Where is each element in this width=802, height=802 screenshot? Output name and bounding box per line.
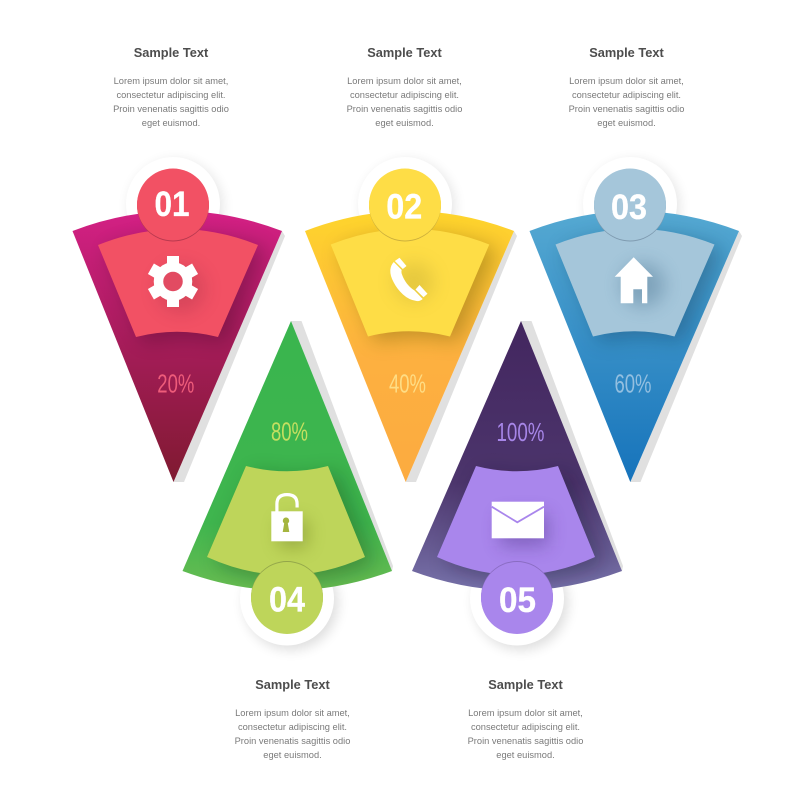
text block 01: Proin venenatis sagittis odio (113, 104, 229, 114)
percent 80: 80% (271, 417, 308, 447)
wedge 02 (305, 211, 514, 482)
badge rings (126, 157, 680, 650)
percent 60: 60% (614, 368, 652, 398)
text block 01: eget euismod. (142, 118, 200, 128)
icon: lock (271, 495, 307, 547)
text block 02: consectetur adipiscing elit. (350, 90, 459, 100)
text block 04: Proin venenatis sagittis odio (235, 736, 350, 746)
text block 02: Lorem ipsum dolor sit amet, (347, 76, 462, 86)
text block 04: consectetur adipiscing elit. (238, 722, 347, 732)
text block 02: Proin venenatis sagittis odio (347, 104, 462, 114)
text block 03: eget euismod. (597, 118, 656, 128)
badge 03: 03 (611, 188, 647, 227)
text block 03: Lorem ipsum dolor sit amet, (569, 76, 684, 86)
text block 05 (468, 677, 583, 760)
text block 03: Proin venenatis sagittis odio (569, 104, 684, 114)
wedge 03 (530, 211, 739, 482)
text block 01: Lorem ipsum dolor sit amet, (114, 76, 228, 86)
inner panel 02 (331, 229, 489, 336)
badge 01: 01 (154, 185, 190, 224)
panel 02: yellow wedge with phone (305, 211, 517, 482)
wedge 01 (72, 211, 282, 482)
inner panel 05 (437, 466, 595, 575)
text block 05: Lorem ipsum dolor sit amet, (468, 708, 583, 718)
badge 04 (251, 561, 323, 634)
percent 100: 100% (496, 417, 544, 447)
text block 02: eget euismod. (375, 118, 434, 128)
badge 02: 02 (386, 187, 422, 226)
text block 04: Lorem ipsum dolor sit amet, (235, 708, 350, 718)
badge 03 (594, 168, 666, 242)
badge 05 (481, 561, 553, 634)
text block 05: Sample Text (488, 677, 563, 692)
icon: phone (390, 258, 434, 302)
icon: envelope (492, 502, 548, 546)
panel 04: green wedge with lock (182, 321, 393, 590)
percent 20: 20% (157, 368, 194, 398)
panel 03: blue wedge with house (530, 211, 742, 482)
icon: house (615, 257, 665, 307)
text block 04: Sample Text (255, 677, 330, 692)
text block 03: consectetur adipiscing elit. (572, 90, 681, 100)
text block 01 (113, 45, 229, 128)
icon: gear (148, 256, 205, 313)
inner panel 03 (556, 229, 714, 336)
text block 04: eget euismod. (263, 750, 322, 760)
text block 05: eget euismod. (496, 750, 555, 760)
panel 05: purple wedge with envelope (412, 321, 623, 590)
percent 40: 40% (389, 368, 426, 398)
wedge 04 (182, 321, 392, 590)
text block 05: Proin venenatis sagittis odio (468, 736, 583, 746)
badge 02 (369, 168, 441, 242)
text block 02: Sample Text (367, 45, 442, 60)
badge 04: 04 (269, 581, 305, 620)
inner panel 01 (98, 229, 258, 337)
text block 05: consectetur adipiscing elit. (471, 722, 580, 732)
text block 01: Sample Text (134, 45, 209, 60)
text block 03 (569, 45, 684, 128)
wedge 05 (412, 321, 622, 590)
badge 01 (137, 168, 209, 242)
text block 01: consectetur adipiscing elit. (116, 90, 226, 100)
inner panel 04 (207, 466, 365, 575)
text block 03: Sample Text (589, 45, 664, 60)
text block 04 (235, 677, 350, 760)
text block 02 (347, 45, 462, 128)
panel 01: red wedge with gear (72, 211, 285, 482)
badge 05: 05 (499, 581, 536, 620)
